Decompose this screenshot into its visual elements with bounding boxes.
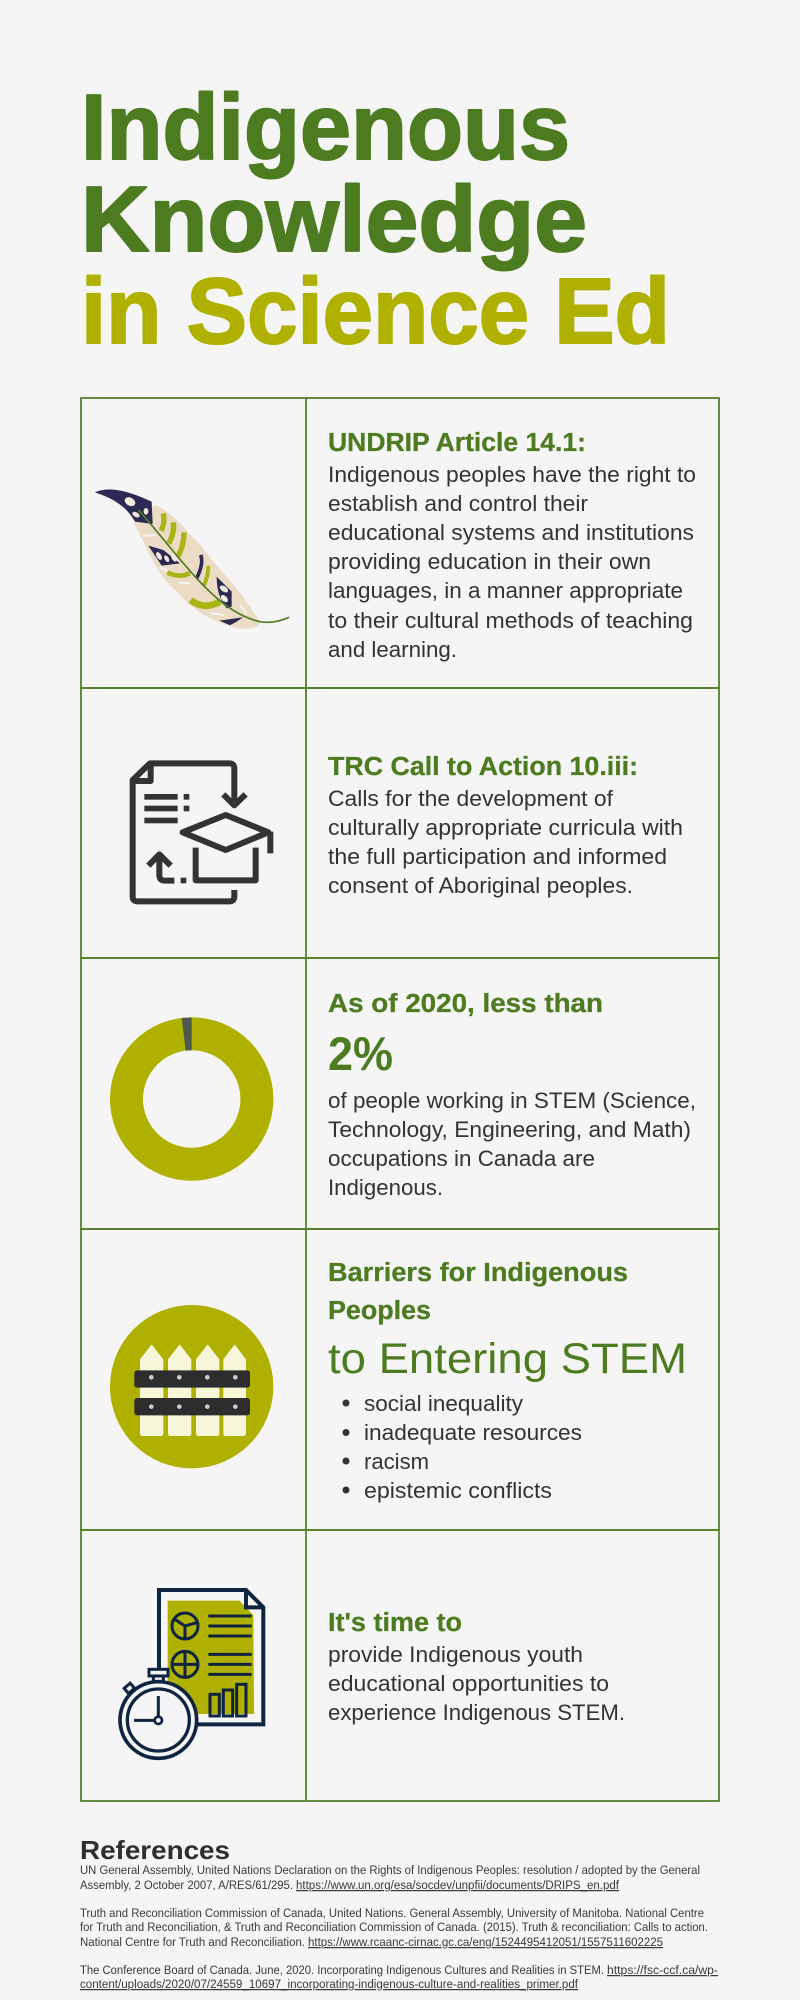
text block: UNDRIP body bbox=[328, 462, 696, 662]
text block: references: The Conference Board of Canada. June, 2020. Incorporating Indigenous Cultures and Realities in STEM. bbox=[80, 1963, 604, 1977]
text block: TRC body: culturally appropriate curricula with bbox=[328, 815, 683, 840]
text block: references: content/uploads/2020/07/24559_10697_incorporating-indigenous-culture-and-realities_primer.pdf bbox=[80, 1977, 579, 1991]
text block: call to action bbox=[328, 1642, 625, 1725]
heading: UNDRIP: UNDRIP Article 14.1: bbox=[328, 429, 586, 457]
list: barriers: inadequate resources bbox=[364, 1420, 582, 1445]
text block: TRC body: Calls for the development of bbox=[328, 786, 614, 811]
icon: report and stopwatch bbox=[120, 1590, 263, 1758]
heading: It's time to: It's time to bbox=[328, 1609, 462, 1637]
big number: 2 percent: 2% bbox=[328, 1028, 393, 1081]
text block: UNDRIP body: providing education in their own bbox=[328, 549, 651, 574]
list: barriers: epistemic conflicts bbox=[364, 1478, 552, 1503]
panel: UNDRIP Article 14.1 bbox=[81, 398, 719, 688]
list: barriers: racism bbox=[364, 1449, 429, 1474]
heading: references: References bbox=[80, 1835, 230, 1865]
text block: STEM share: occupations in Canada are bbox=[328, 1146, 595, 1171]
text block: references: UN General Assembly, United Nations Declaration on the Rights of Indigenous Peoples: resolution / adopted by the General bbox=[80, 1863, 700, 1877]
list: barriers: social inequality bbox=[364, 1391, 523, 1416]
text block: STEM share: of people working in STEM (Science, bbox=[328, 1088, 696, 1113]
icon: feather bbox=[95, 490, 289, 629]
panel: less than 2 percent bbox=[81, 958, 719, 1229]
subheading: to Entering STEM: to Entering STEM bbox=[328, 1335, 687, 1383]
text block: UNDRIP body: establish and control their bbox=[328, 491, 588, 516]
text block: TRC body: the full participation and informed bbox=[328, 844, 667, 869]
text block: call to action: experience Indigenous STEM. bbox=[328, 1700, 625, 1725]
heading: As of 2020: As of 2020, less than bbox=[328, 990, 603, 1018]
text block: STEM share: Technology, Engineering, and Math) bbox=[328, 1117, 691, 1142]
text block: TRC body bbox=[328, 786, 683, 898]
text block: UNDRIP body: languages, in a manner appropriate bbox=[328, 578, 683, 603]
text block: references: https://www.un.org/esa/socdev/unpfii/documents/DRIPS_en.pdf bbox=[296, 1878, 620, 1892]
panel: it's time to bbox=[81, 1530, 719, 1801]
text block: STEM share: Indigenous. bbox=[328, 1175, 443, 1200]
text block: references: Assembly, 2 October 2007, A/RES/61/295. bbox=[80, 1878, 293, 1892]
heading: barriers bbox=[328, 1259, 628, 1325]
title bbox=[81, 75, 670, 363]
text block: STEM share bbox=[328, 1088, 696, 1200]
text block: TRC body: consent of Aboriginal peoples. bbox=[328, 873, 633, 898]
text block: references: National Centre for Truth and Reconciliation. bbox=[80, 1935, 305, 1949]
heading: barriers: Barriers for Indigenous bbox=[328, 1259, 628, 1287]
panel: barriers bbox=[81, 1229, 719, 1530]
text block: UNDRIP body: Indigenous peoples have the right to bbox=[328, 462, 696, 487]
title: in Science Ed bbox=[81, 259, 670, 363]
text block: UNDRIP body: educational systems and institutions bbox=[328, 520, 694, 545]
title: Indigenous bbox=[81, 75, 570, 179]
icon: fence in circle bbox=[110, 1305, 273, 1468]
heading: barriers: Peoples bbox=[328, 1297, 431, 1325]
text block: call to action: provide Indigenous youth bbox=[328, 1642, 583, 1667]
text block: UNDRIP body: to their cultural methods of teaching bbox=[328, 608, 693, 633]
panel: TRC Call to Action bbox=[81, 688, 719, 958]
title: Knowledge bbox=[81, 167, 587, 271]
text block: call to action: educational opportunities to bbox=[328, 1671, 609, 1696]
text block: references: for Truth and Reconciliation, & Truth and Reconciliation Commission of Canada. (2015). Truth & reconciliation: Calls to action. bbox=[80, 1920, 708, 1934]
text block: references bbox=[80, 1863, 718, 1991]
text block: references: Truth and Reconciliation Commission of Canada, United Nations. General Assembly, University of Manitoba. National Centre bbox=[80, 1906, 704, 1920]
text block: references: https://fsc-ccf.ca/wp- bbox=[607, 1963, 718, 1977]
text block: references: https://www.rcaanc-cirnac.gc.ca/eng/1524495412051/1557511602225 bbox=[308, 1935, 663, 1949]
list: barriers bbox=[342, 1391, 582, 1503]
chart: donut 2 percent bbox=[126, 1018, 257, 1164]
icon: document and graduation cap bbox=[133, 763, 270, 901]
heading: TRC: TRC Call to Action 10.iii: bbox=[328, 753, 638, 781]
text block: UNDRIP body: and learning. bbox=[328, 637, 457, 662]
